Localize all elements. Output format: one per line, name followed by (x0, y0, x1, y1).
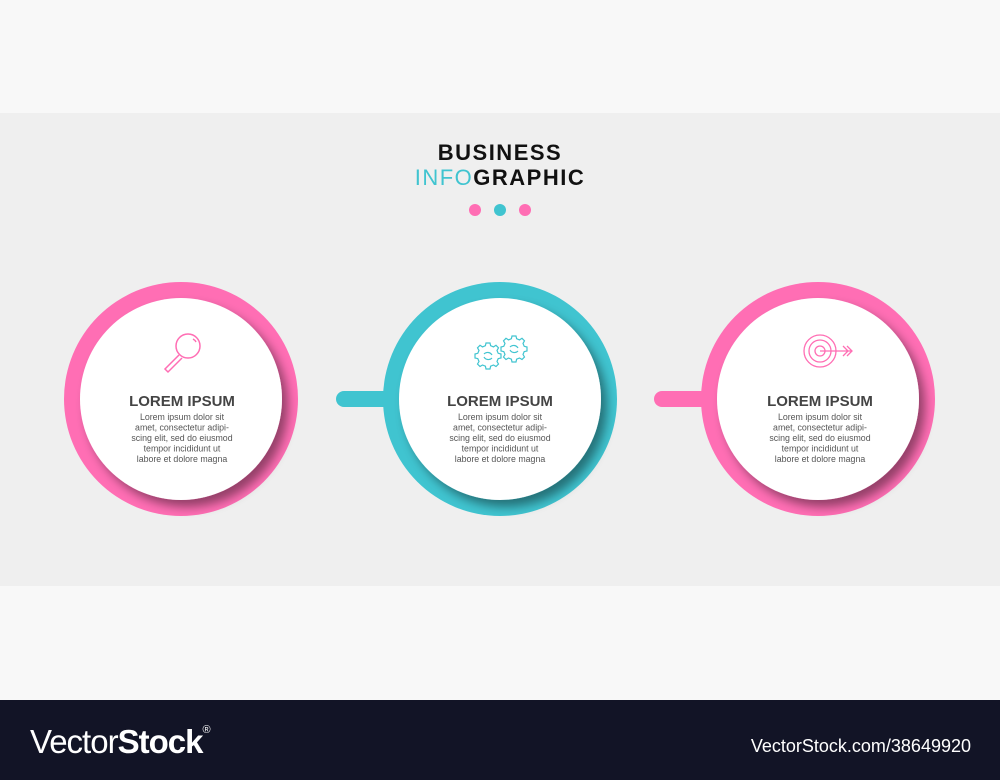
title: BUSINESS (438, 140, 562, 165)
body text: amet, consectetur adipi- (135, 422, 229, 432)
body text: scing elit, sed do eiusmod (449, 433, 551, 443)
body text (769, 412, 871, 464)
footer logo: VectorStock (30, 723, 202, 760)
footer url: VectorStock.com/38649920 (751, 736, 971, 756)
icon: gears (475, 336, 527, 369)
connector: pink (654, 391, 714, 407)
heading: LOREM IPSUM (129, 393, 235, 410)
body text: amet, consectetur adipi- (453, 422, 547, 432)
body text: labore et dolore magna (455, 454, 545, 464)
body text: amet, consectetur adipi- (773, 422, 867, 432)
title (415, 140, 585, 190)
icon: magnifier (165, 334, 200, 372)
footer logo: ® (202, 724, 210, 736)
body text: scing elit, sed do eiusmod (769, 433, 871, 443)
title dots (469, 204, 531, 216)
body text: tempor incididunt ut (782, 444, 859, 454)
connector: teal (336, 391, 396, 407)
panel: step 1 (64, 282, 298, 516)
body text: labore et dolore magna (775, 454, 865, 464)
body text: Lorem ipsum dolor sit (778, 412, 863, 422)
body text (449, 412, 551, 464)
body text: tempor incididunt ut (462, 444, 539, 454)
panel: step 3 (701, 282, 935, 516)
footer bar (0, 700, 1000, 780)
title: INFOGRAPHIC (415, 165, 585, 190)
body text: scing elit, sed do eiusmod (131, 433, 233, 443)
heading: LOREM IPSUM (767, 393, 873, 410)
icon: target (804, 335, 852, 367)
body text: Lorem ipsum dolor sit (458, 412, 543, 422)
body text: labore et dolore magna (137, 454, 227, 464)
body text: tempor incididunt ut (144, 444, 221, 454)
body text: Lorem ipsum dolor sit (140, 412, 225, 422)
body text (131, 412, 233, 464)
heading: LOREM IPSUM (447, 393, 553, 410)
panel: step 2 (383, 282, 617, 516)
